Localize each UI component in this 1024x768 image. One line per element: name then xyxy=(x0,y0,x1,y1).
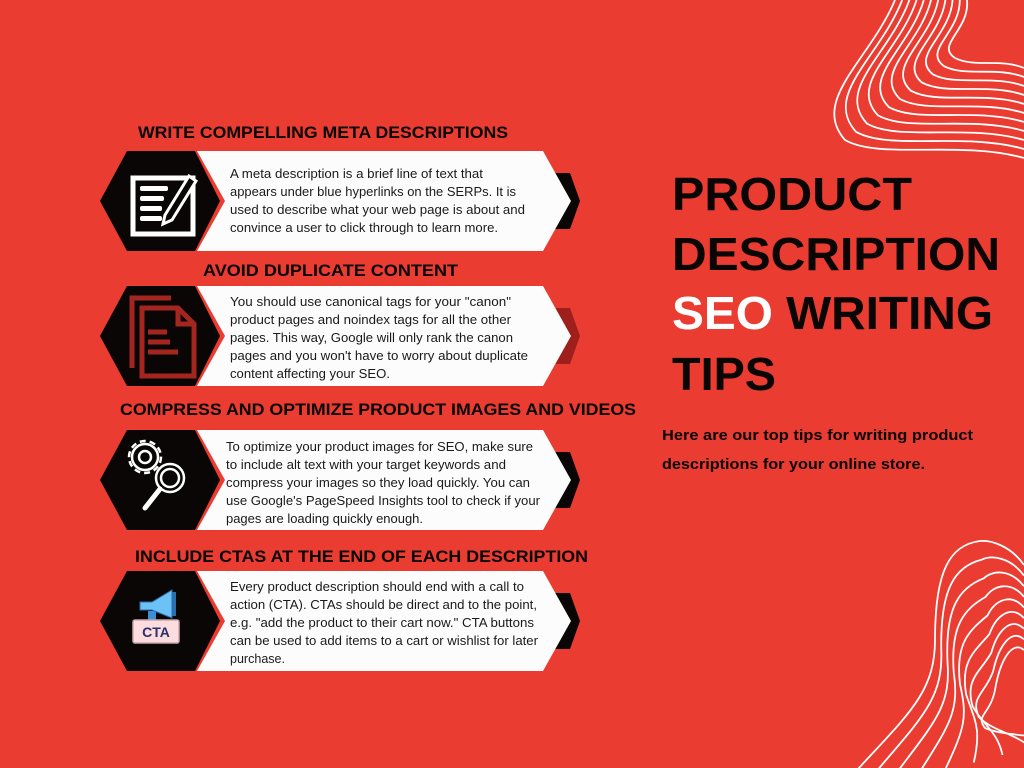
title: TIPS xyxy=(672,348,776,400)
icon: gear and magnifier xyxy=(129,441,184,508)
icon: document with pencil xyxy=(133,176,196,234)
icon: megaphone CTA xyxy=(133,590,179,643)
text: CTA body: purchase. xyxy=(230,652,285,666)
icon: duplicate documents xyxy=(132,298,194,376)
title: DESCRIPTION xyxy=(672,228,1000,280)
title xyxy=(672,168,1000,400)
text: meta description body: A meta description is a brief line of text that xyxy=(230,167,484,181)
text: CTA body xyxy=(230,580,538,666)
text: duplicate content body: You should use canonical tags for your "canon" xyxy=(230,295,511,309)
title: SEO WRITING xyxy=(672,287,993,339)
text: image optimization body: use Google's PageSpeed Insights tool to check if your xyxy=(226,494,540,508)
text: meta description body xyxy=(230,167,525,235)
text: CTA body: Every product description should end with a call to xyxy=(230,580,524,594)
text: image optimization body: to include alt text with your target keywords and xyxy=(226,458,506,472)
text: CTA body: e.g. "add the product to their cart now." CTA buttons xyxy=(230,616,534,630)
text: image optimization body xyxy=(226,440,540,526)
text: meta description body: convince a user to click through to learn more. xyxy=(230,221,498,235)
text: image optimization body: pages are loading quickly enough. xyxy=(226,512,423,526)
subtitle xyxy=(662,427,973,473)
text: meta description body: appears under blue hyperlinks on the SERPs. It is xyxy=(230,185,516,199)
heading: include CTAs: INCLUDE CTAS AT THE END OF EACH DESCRIPTION xyxy=(135,547,588,566)
text: duplicate content body: content affecting your SEO. xyxy=(230,367,390,381)
text: duplicate content body: pages and you won't have to worry about duplicate xyxy=(230,349,528,363)
panel: duplicate content xyxy=(100,261,580,386)
panel: meta descriptions xyxy=(100,123,580,251)
heading: compress and optimize: COMPRESS AND OPTIMIZE PRODUCT IMAGES AND VIDEOS xyxy=(120,400,636,419)
subtitle: descriptions for your online store. xyxy=(662,456,925,473)
text: duplicate content body: product pages and noindex tags for all the other xyxy=(230,313,511,327)
heading: avoid duplicate content: AVOID DUPLICATE CONTENT xyxy=(203,261,459,280)
text: CTA body: action (CTA). CTAs should be direct and to the point, xyxy=(230,598,537,612)
panel: CTAs xyxy=(100,547,588,671)
subtitle: Here are our top tips for writing product xyxy=(662,427,973,444)
text: image optimization body: To optimize your product images for SEO, make sure xyxy=(226,440,533,454)
text: meta description body: used to describe what your web page is about and xyxy=(230,203,525,217)
heading: write compelling meta descriptions: WRITE COMPELLING META DESCRIPTIONS xyxy=(138,123,508,142)
text: duplicate content body xyxy=(230,295,528,381)
text: image optimization body: compress your images so they load quickly. You can xyxy=(226,476,530,490)
panel: images and videos xyxy=(100,400,636,530)
title: PRODUCT xyxy=(672,168,912,220)
text: duplicate content body: pages. This way, Google will only rank the canon xyxy=(230,331,513,345)
text: CTA body: can be used to add items to a cart or wishlist for later xyxy=(230,634,538,648)
icon: megaphone CTA: CTA xyxy=(142,624,170,640)
